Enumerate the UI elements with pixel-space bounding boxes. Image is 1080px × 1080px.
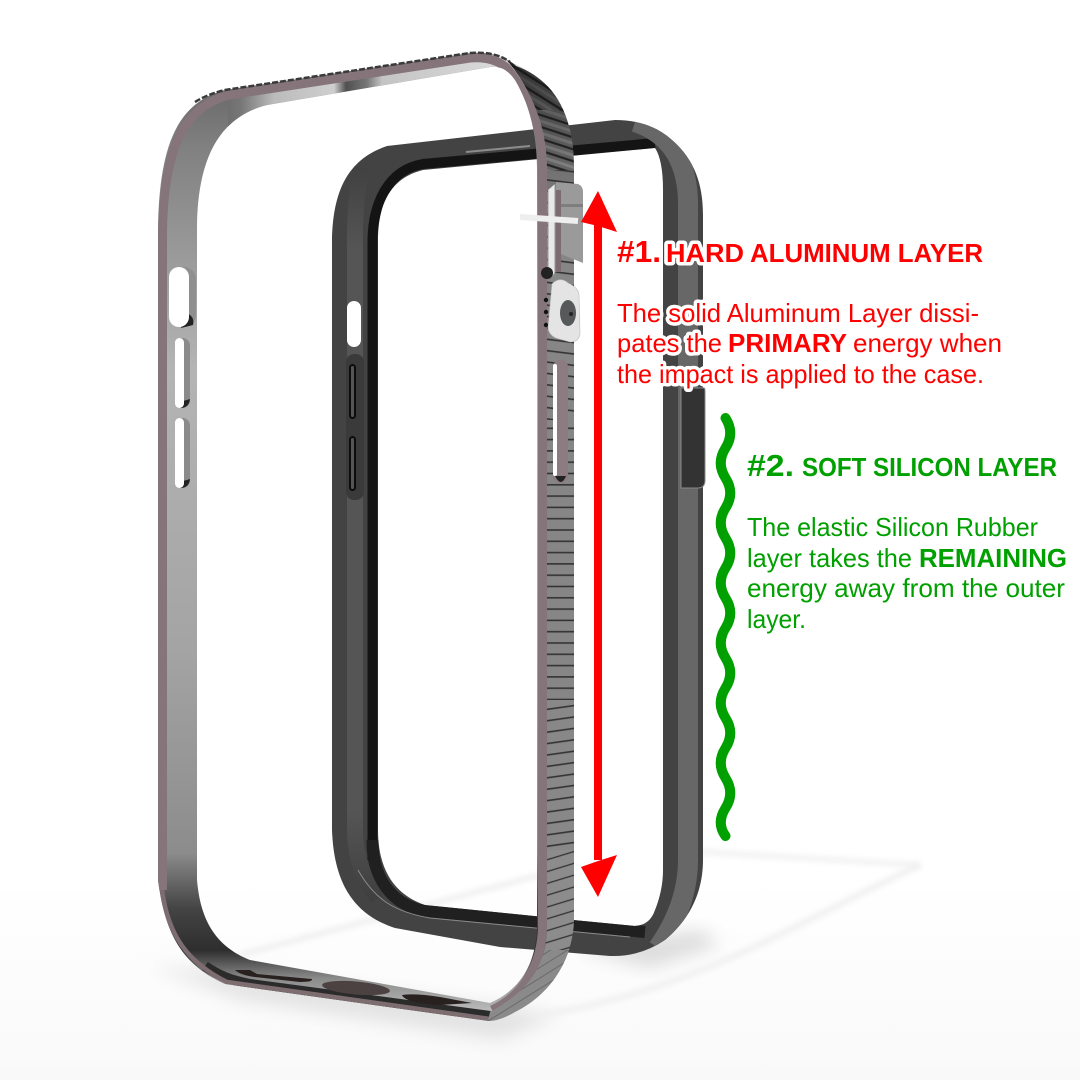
silicone frame body bbox=[332, 118, 703, 958]
body text 1: pates the bbox=[617, 328, 722, 358]
body text 2: layer takes the bbox=[747, 543, 912, 573]
outer aluminum layer bbox=[158, 50, 583, 1030]
aluminum left upper oval cutout bbox=[169, 267, 196, 328]
volume button housing bbox=[346, 354, 364, 500]
aluminum side latch bbox=[520, 182, 583, 483]
heading 1: ALUMINUM LAYER bbox=[750, 238, 983, 268]
floor shadows bbox=[0, 850, 1080, 1080]
silicone dark inner lip bbox=[372, 143, 655, 860]
callout 1: hard aluminum layer bbox=[617, 234, 1002, 389]
aluminum ridged right strip bbox=[488, 60, 574, 1021]
silicone top highlight bbox=[466, 146, 530, 152]
latch screw bbox=[560, 300, 576, 326]
body text 1: the impact is applied to the case. bbox=[617, 359, 984, 389]
body text 1 bbox=[617, 298, 1002, 389]
heading 1: #1. bbox=[617, 234, 661, 269]
body text 1: energy when bbox=[853, 328, 1002, 358]
red double-headed arrow bbox=[581, 191, 617, 897]
body text 2: REMAINING bbox=[919, 543, 1067, 573]
silicone right light band bbox=[635, 122, 688, 948]
body text 2: energy away from the outer bbox=[747, 573, 1065, 603]
latch white wire bbox=[548, 184, 555, 276]
aluminum top silver strip bbox=[228, 54, 530, 126]
aluminum bottom dark edge bbox=[205, 966, 490, 1016]
heading 2 bbox=[747, 448, 1057, 483]
power button bbox=[681, 388, 705, 488]
latch purple inset bbox=[554, 190, 561, 272]
body text 1: The solid Aluminum Layer dissi- bbox=[617, 298, 979, 328]
heading 1: HARD bbox=[666, 238, 744, 268]
aluminum left middle cutout bbox=[175, 338, 190, 408]
aluminum top ridge edge bbox=[195, 53, 510, 102]
latch white plate bbox=[548, 280, 580, 342]
body text 2 bbox=[747, 512, 1067, 634]
silicone side hole bbox=[347, 301, 361, 347]
aluminum bottom purple edge bbox=[162, 890, 490, 1019]
heading 2: SOFT SILICON LAYER bbox=[802, 452, 1057, 482]
latch cover plate bbox=[556, 182, 583, 263]
callout 2: soft silicon layer bbox=[747, 448, 1067, 634]
latch white band bbox=[520, 217, 578, 221]
green wavy line bbox=[721, 418, 730, 836]
aluminum left lower cutout bbox=[175, 418, 190, 488]
silicone mid band bbox=[347, 166, 364, 852]
body text 1: PRIMARY bbox=[728, 328, 847, 358]
body text 2: layer. bbox=[747, 604, 806, 634]
inner silicone layer bbox=[332, 118, 705, 958]
body text 2: The elastic Silicon Rubber bbox=[747, 512, 1038, 542]
aluminum frame body bbox=[158, 53, 574, 1021]
heading 1 bbox=[617, 234, 983, 269]
silicone bottom dark lip bbox=[372, 840, 645, 932]
heading 2: #2. bbox=[747, 448, 794, 483]
side slot bbox=[553, 360, 568, 483]
latch connector dots bbox=[541, 267, 553, 279]
aluminum bottom cutouts bbox=[235, 970, 472, 1005]
aluminum purple edge ring bbox=[162, 58, 542, 1010]
silicone bottom highlight bbox=[358, 870, 630, 937]
